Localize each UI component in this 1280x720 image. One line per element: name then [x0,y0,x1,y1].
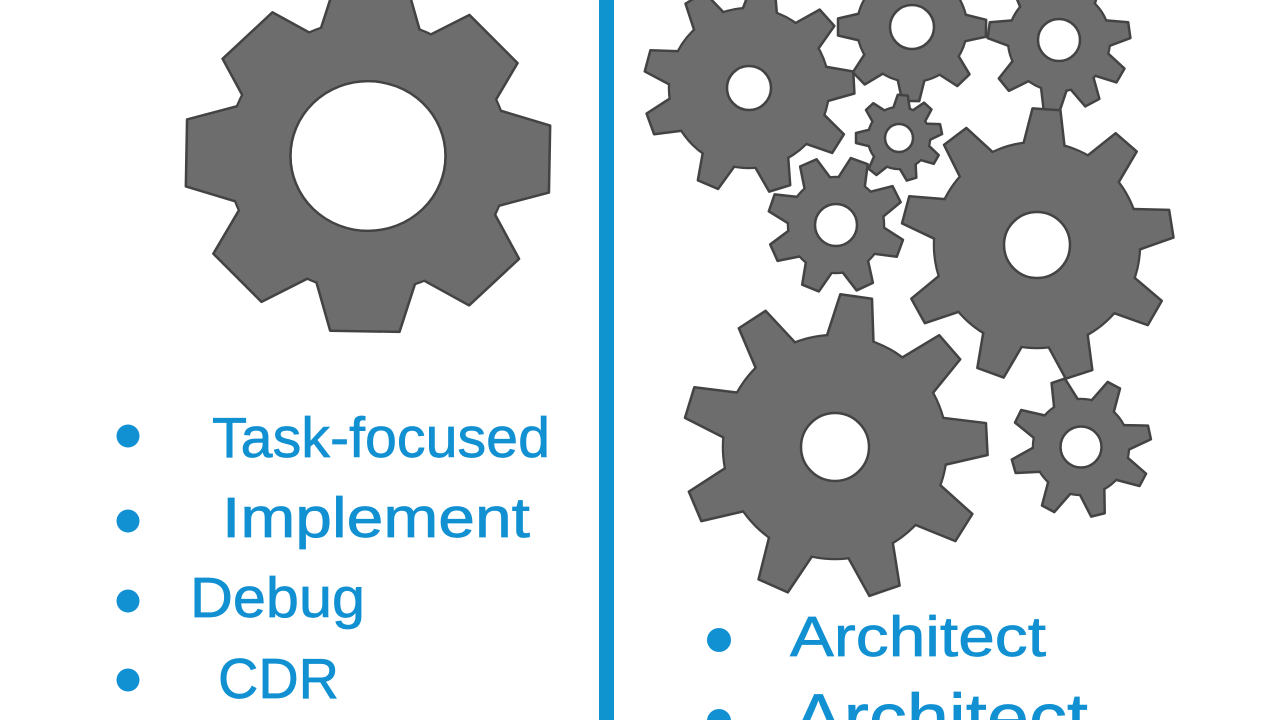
list item: Architect [707,605,1046,669]
gear: top right [987,0,1131,112]
gear: upper left [643,0,855,194]
list item: CDR [116,647,339,711]
list item: CDR: CDR [218,647,339,711]
bullet list: right [707,605,1088,720]
gear: large right [900,108,1175,381]
list item: Implement: Implement [222,486,530,550]
bullet list: left [116,406,550,711]
icon: single large gear [186,0,550,332]
panel: right column [643,0,1175,720]
list item: Architect: Architect [790,605,1046,669]
gear: small centre [856,94,943,182]
gear: middle left [767,156,905,294]
list item: Debug [116,566,365,630]
list item: Architect, larger [707,680,1088,720]
list item: Debug: Debug [190,566,365,630]
panel: left column [116,0,550,711]
gear: small lower right [1010,376,1152,518]
gear: large lower [682,293,988,599]
list item: Implement [116,486,530,550]
gear: top centre [838,0,986,101]
list item: Task-focused: Task-focused [212,406,550,470]
icon: gear cluster [643,0,1175,599]
vertical divider [599,0,614,720]
